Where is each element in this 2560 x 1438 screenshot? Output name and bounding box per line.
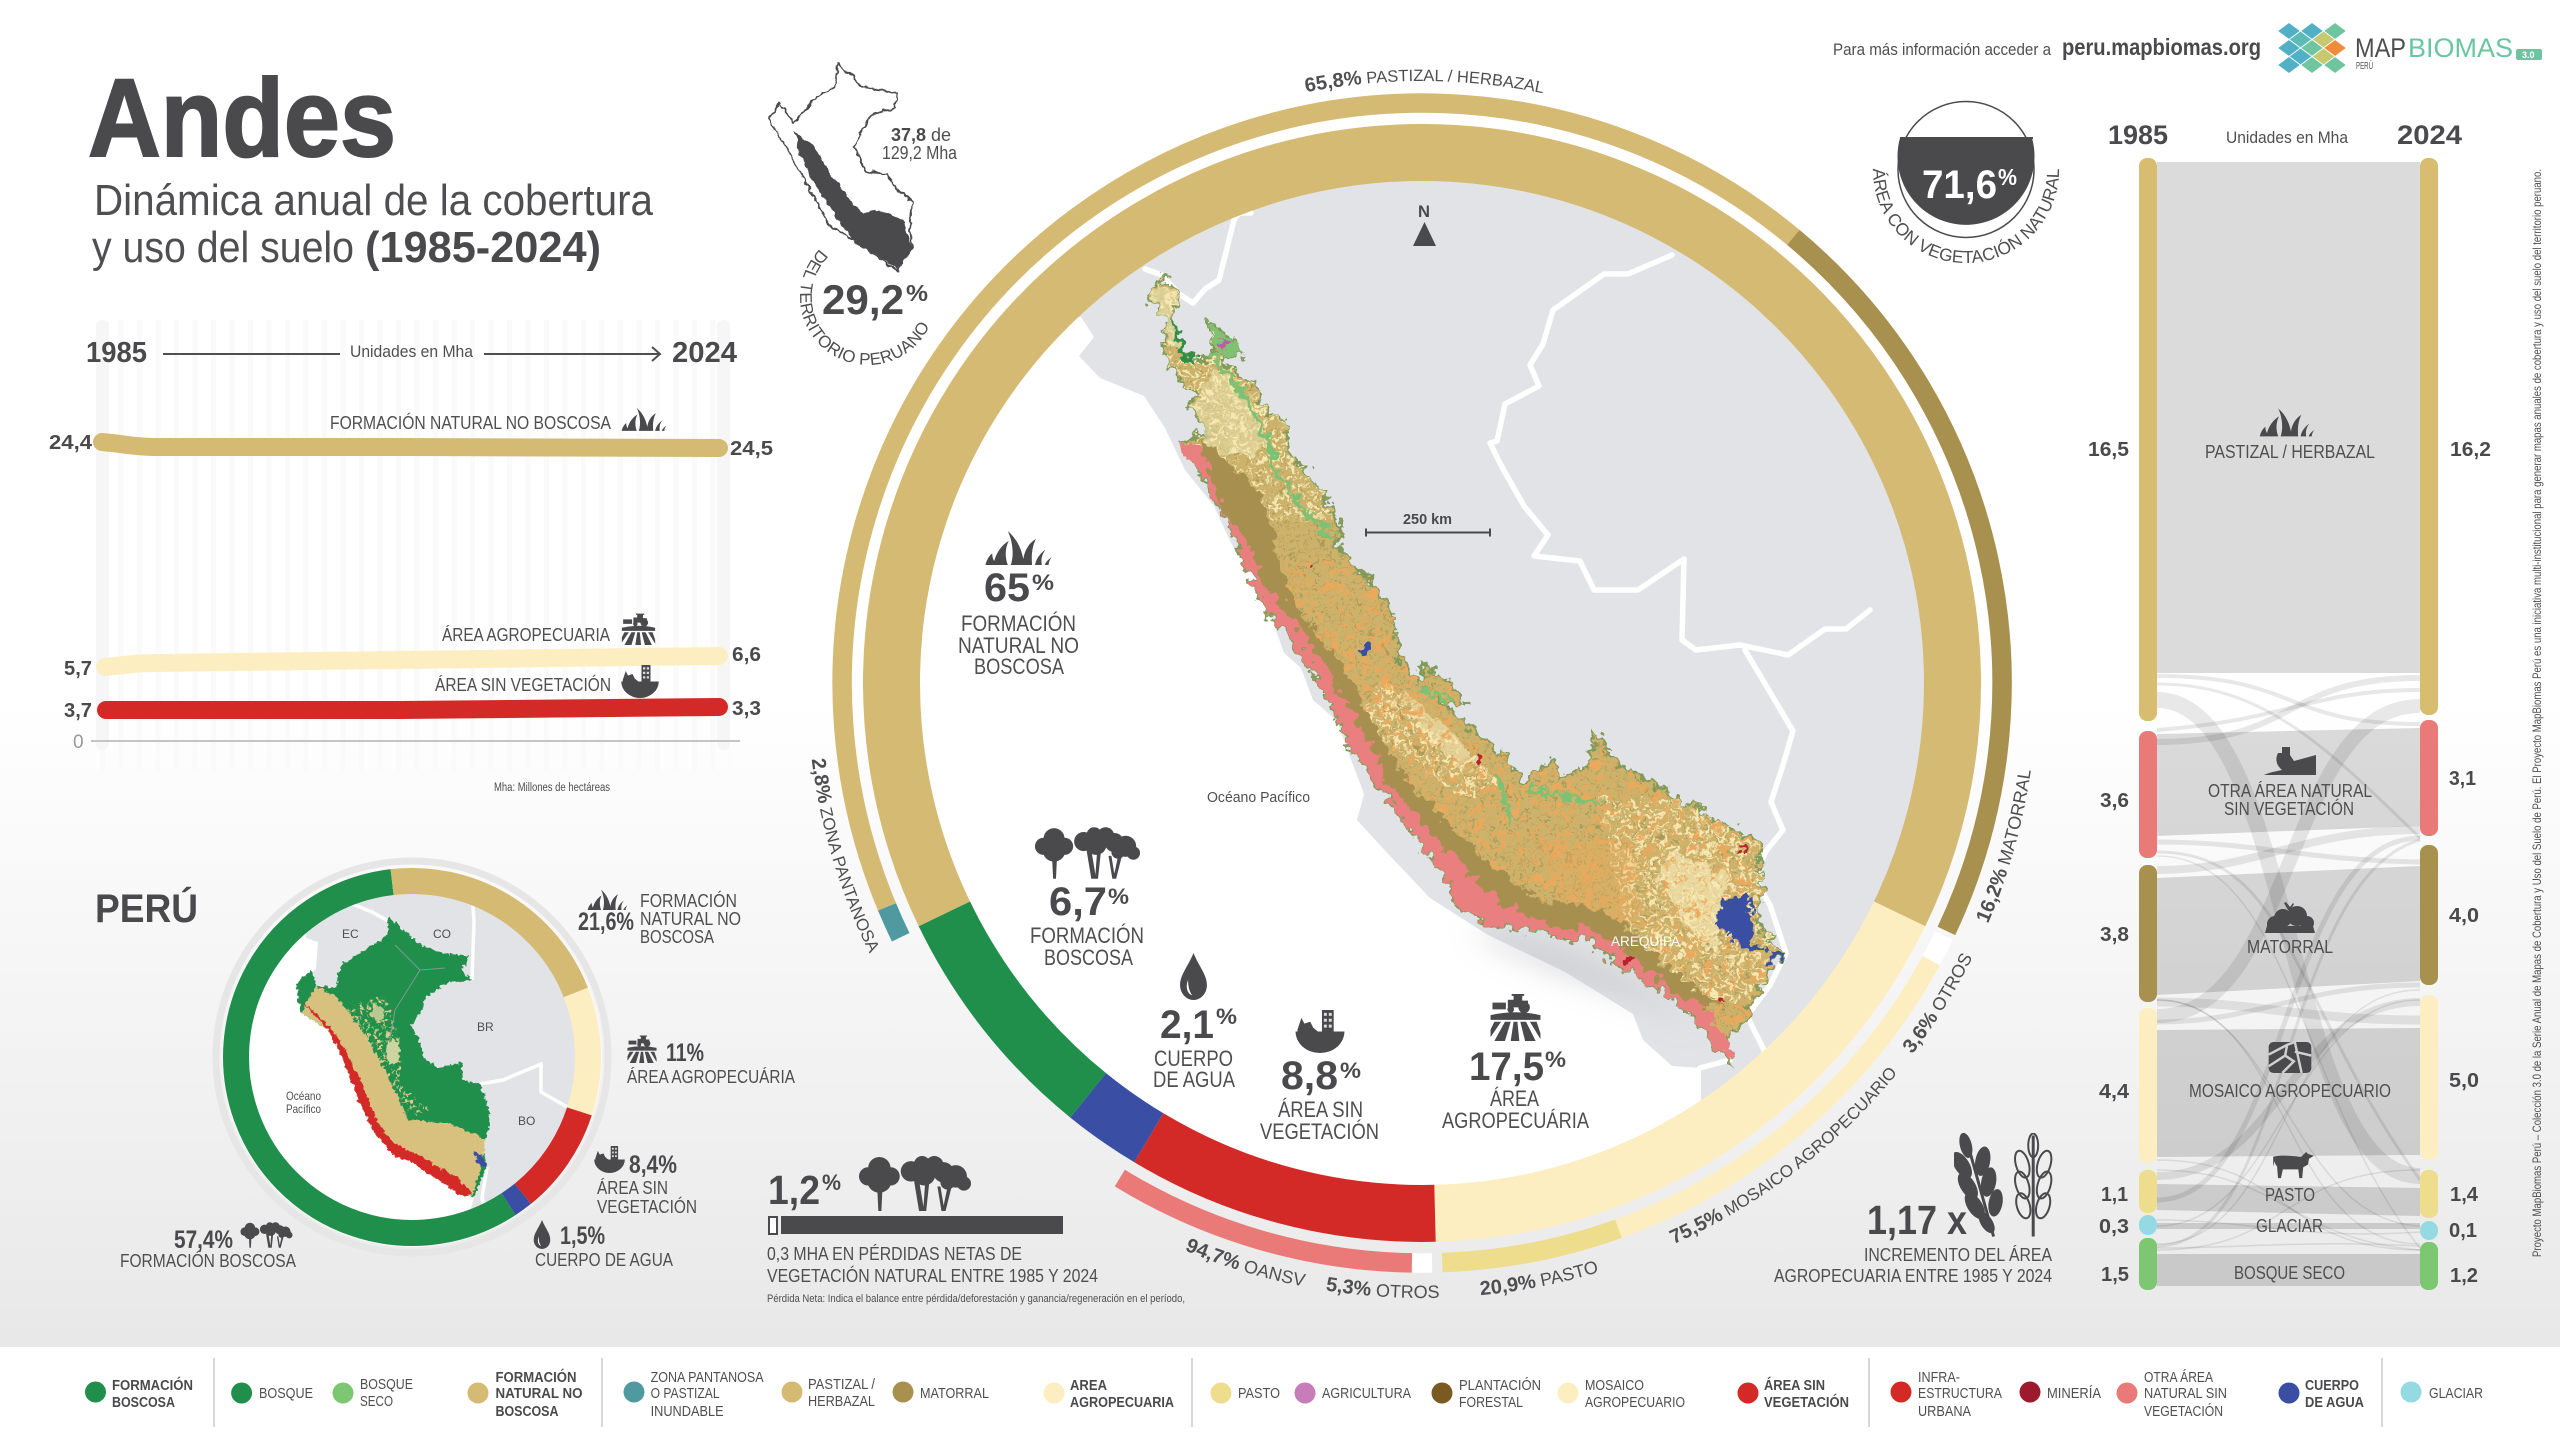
callout: pérdidas netas 1,2%: 0,3 MHA EN PÉRDIDAS NETAS DE	[767, 1244, 1022, 1264]
series: área sin vegetación	[64, 665, 761, 722]
mini map labels: Pacífico	[286, 1102, 321, 1116]
sankey node: matorral: 3,8	[2100, 924, 2129, 946]
series: formación natural no boscosa	[49, 408, 773, 460]
label: formación boscosa 57,4%	[120, 1222, 296, 1271]
curved ring labels: 2,8% ZONA PANTANOSA	[810, 758, 878, 954]
legend: infraestructura urbana: URBANA	[1918, 1404, 1971, 1420]
sankey node: glaciar: 0,3	[2099, 1216, 2129, 1238]
series: formación natural no boscosa: 24,5	[730, 438, 773, 460]
label: cuerpo de agua 1,5%: CUERPO DE AGUA	[535, 1250, 673, 1270]
sankey header	[2108, 120, 2462, 150]
legend: zona pantanosa	[624, 1370, 764, 1420]
stat: cuerpo de agua 2,1%	[1153, 953, 1237, 1092]
stat: formación natural no boscosa 65%: FORMACIÓN	[961, 611, 1076, 636]
mini map labels	[286, 927, 535, 1128]
heading: Perú: PERÚ	[95, 885, 198, 931]
callout: pérdidas netas 1,2%: Pérdida Neta: Indica el balance entre pérdida/deforestación y ganancia/regeneración en el período,	[767, 1293, 1185, 1305]
donut segments	[236, 881, 588, 1233]
north arrow	[1413, 202, 1436, 246]
label: cuerpo de agua 1,5%	[534, 1220, 673, 1270]
curved ring labels: 5,3% OTROS	[1326, 1277, 1439, 1298]
legend: agricultura: AGRICULTURA	[1322, 1386, 1411, 1402]
legend: formación natural no boscosa: FORMACIÓN	[496, 1368, 576, 1386]
sankey node: pasto: 1,4	[2450, 1184, 2479, 1206]
legend: otra área natural sin vegetación	[2116, 1369, 2227, 1420]
header: more information link	[1833, 34, 2261, 60]
label: área agropecuaria 11%: 11%	[666, 1039, 704, 1067]
sankey node: glaciar	[2099, 1215, 2477, 1242]
badge: 71,6% área con vegetación natural: %	[1998, 164, 2017, 190]
scale bar	[1366, 511, 1490, 536]
legend: bosque seco	[332, 1377, 413, 1410]
legend: zona pantanosa: INUNDABLE	[651, 1404, 724, 1420]
outer ring segments	[842, 103, 2002, 1263]
header: more information link: peru.mapbiomas.org	[2062, 34, 2261, 60]
curved ring labels: 3,6% OTROS	[1903, 954, 1971, 1052]
label: formación natural no boscosa 21,6%: 21,6%	[578, 908, 634, 936]
panel: sankey transitions 1985-2024	[2088, 120, 2491, 1290]
legend: matorral: MATORRAL	[920, 1386, 989, 1402]
panel: Perú donut	[95, 860, 795, 1271]
legend: pastizal / herbazal	[782, 1377, 876, 1410]
legend: bosque: BOSQUE	[259, 1386, 313, 1402]
mini map labels: EC	[342, 927, 359, 941]
series: área agropecuaria: 5,7	[64, 658, 92, 680]
stat: formación natural no boscosa 65%: NATURAL NO	[958, 633, 1079, 658]
subtitle: y uso del suelo	[92, 223, 354, 272]
legend: zona pantanosa: ZONA PANTANOSA	[651, 1370, 764, 1386]
series: área agropecuaria: ÁREA AGROPECUARIA	[442, 625, 610, 645]
legend: bosque	[231, 1382, 313, 1404]
sankey header: 1985	[2108, 120, 2168, 150]
sankey node: bosque seco: 1,5	[2101, 1264, 2129, 1286]
stat: formación boscosa 6,7%: %	[1108, 884, 1129, 909]
map label: Océano Pacífico: Océano Pacífico	[1207, 789, 1310, 806]
legend: formación natural no boscosa: NATURAL NO	[496, 1386, 582, 1402]
series: área sin vegetación: 3,7	[64, 700, 92, 722]
label: cuerpo de agua 1,5%: 1,5%	[560, 1222, 605, 1250]
label: área sin vegetación 8,4%: VEGETACIÓN	[597, 1196, 697, 1217]
logo: MapBiomas	[2278, 22, 2542, 74]
mini map labels: Océano	[286, 1089, 321, 1103]
mini map labels: BO	[518, 1114, 535, 1128]
callout: incremento agropecuario 1,17 x: 1,17 x	[1867, 1197, 1967, 1243]
stat: cuerpo de agua 2,1%: %	[1216, 1004, 1237, 1029]
sankey header: Unidades en Mha	[2226, 129, 2349, 147]
callout: pérdidas netas 1,2%: 1,2	[768, 1167, 820, 1213]
label: área agropecuaria 11%	[627, 1036, 795, 1087]
legend: formación natural no boscosa	[468, 1368, 582, 1420]
legend: pasto: PASTO	[1238, 1386, 1280, 1402]
mini map labels: CO	[433, 927, 451, 941]
stat: área sin vegetación 8,8%: 8,8	[1281, 1054, 1338, 1098]
label: área sin vegetación 8,4%	[594, 1146, 697, 1217]
legend: otra área natural sin vegetación: OTRA ÁREA	[2144, 1369, 2213, 1386]
stat: área sin vegetación 8,8%: %	[1340, 1058, 1361, 1083]
map: Andes land cover	[1146, 276, 1783, 1061]
sankey node: matorral	[2100, 845, 2479, 1002]
subtitle: (1985-2024)	[365, 223, 601, 272]
stat: formación natural no boscosa 65%: BOSCOSA	[974, 654, 1064, 679]
text: 37,8 de 129,2 Mha: 129,2 Mha	[882, 143, 958, 163]
label: formación natural no boscosa 21,6%	[578, 890, 741, 947]
stat: área agropecuaria 17,5%: AGROPECUÁRIA	[1442, 1108, 1589, 1133]
sankey node: otra área natural sin vegetación: OTRA ÁREA NATURAL	[2208, 781, 2372, 801]
sankey node: glaciar: 0,1	[2449, 1220, 2477, 1242]
chart years header: 2024	[672, 337, 737, 369]
stat: formación boscosa 6,7%: 6,7	[1049, 880, 1107, 924]
series: formación natural no boscosa: 24,4	[49, 432, 93, 454]
legend: infraestructura urbana	[1890, 1370, 2002, 1420]
legend: otra área natural sin vegetación: NATURAL SIN	[2144, 1386, 2227, 1402]
legend: infraestructura urbana: INFRA-	[1918, 1370, 1960, 1386]
curved text: del territorio peruano: DEL TERRITORIO PERUANO	[800, 250, 928, 365]
sankey node: bosque seco: 1,2	[2450, 1265, 2478, 1287]
map: regional land	[1078, 181, 1924, 1100]
legend: bosque seco: BOSQUE	[360, 1377, 413, 1393]
curved ring labels: 16,2% MATORRAL	[1977, 770, 2031, 923]
legend: infraestructura urbana: ESTRUCTURA	[1918, 1386, 2002, 1402]
label: formación natural no boscosa 21,6%: BOSCOSA	[640, 927, 714, 947]
legend: mosaico agropecuario	[1558, 1378, 1685, 1411]
subtitle: Dinámica anual de la cobertura	[94, 176, 653, 225]
badge: 71,6% área con vegetación natural: ÁREA CON VEGETACIÓN NATURAL	[1872, 168, 2060, 263]
logo: MapBiomas: 3.0	[2522, 50, 2535, 60]
sankey node: matorral: 4,0	[2449, 905, 2479, 927]
legend: área sin vegetación: VEGETACIÓN	[1764, 1393, 1849, 1411]
stat: área agropecuaria 17,5%	[1442, 994, 1589, 1133]
thick ring segments	[892, 152, 1952, 1213]
legend: área agropecuaria: AREA	[1070, 1378, 1107, 1394]
bar: pérdida	[769, 1216, 1063, 1234]
panel: line chart 1985-2024	[49, 320, 773, 794]
curved ring labels: 20,9% PASTO	[1480, 1262, 1597, 1296]
legend: pastizal / herbazal: HERBAZAL	[808, 1394, 875, 1410]
sankey node: otra área natural sin vegetación: 3,6	[2100, 790, 2129, 812]
stat: formación natural no boscosa 65%: %	[1032, 570, 1054, 595]
stat: 29,2%: %	[906, 280, 928, 306]
badge: 71,6% área con vegetación natural	[1872, 100, 2060, 263]
label: formación natural no boscosa 21,6%: NATURAL NO	[640, 909, 741, 929]
label: área sin vegetación 8,4%: 8,4%	[629, 1151, 677, 1179]
sankey node: matorral: MATORRAL	[2247, 937, 2333, 957]
legend: plantación forestal	[1432, 1377, 1541, 1411]
stat: formación natural no boscosa 65%	[958, 531, 1079, 679]
logo: MapBiomas: BIOMAS	[2408, 33, 2513, 63]
logo: MapBiomas: MAP	[2355, 33, 2406, 63]
stat: formación natural no boscosa 65%: 65	[984, 566, 1030, 610]
sankey node: otra área natural sin vegetación	[2100, 720, 2476, 858]
sankey node: pasto: 1,1	[2101, 1184, 2128, 1206]
legend: agricultura	[1294, 1382, 1411, 1404]
sankey node: bosque seco: BOSQUE SECO	[2234, 1263, 2345, 1283]
sankey node: pastizal / herbazal: PASTIZAL / HERBAZAL	[2205, 442, 2375, 462]
logo: MapBiomas: PERÚ	[2356, 59, 2373, 72]
sankey node: glaciar: GLACIAR	[2256, 1216, 2323, 1236]
callout: incremento agropecuario 1,17 x	[1774, 1131, 2054, 1286]
sankey node: otra área natural sin vegetación: 3,1	[2449, 768, 2476, 790]
legend: pastizal / herbazal: PASTIZAL /	[808, 1377, 876, 1393]
stat: formación boscosa 6,7%	[1030, 827, 1144, 970]
legend: área sin vegetación: ÁREA SIN	[1764, 1377, 1825, 1394]
mini map labels: BR	[477, 1020, 494, 1034]
sankey node: pasto: PASTO	[2265, 1185, 2315, 1205]
chart note: Mha: Millones de hectáreas	[494, 782, 610, 794]
legend: área sin vegetación	[1738, 1377, 1849, 1411]
sankey node: mosaico agropecuario: MOSAICO AGROPECUARIO	[2189, 1081, 2391, 1101]
badge: 71,6% área con vegetación natural: 71,6	[1922, 163, 1997, 207]
curved ring labels: 94,7% OANSV	[1186, 1238, 1306, 1286]
legend: otra área natural sin vegetación: VEGETACIÓN	[2144, 1403, 2223, 1420]
icon: Perú outline	[769, 64, 912, 271]
sankey node: pastizal / herbazal: 16,2	[2450, 439, 2491, 461]
title: Andes	[88, 57, 396, 180]
legend: mosaico agropecuario: MOSAICO	[1585, 1378, 1644, 1394]
chart years header: 1985	[86, 337, 147, 369]
callout: pérdidas netas 1,2%: VEGETACIÓN NATURAL ENTRE 1985 Y 2024	[767, 1265, 1098, 1286]
curved ring labels: 65,8% PASTIZAL / HERBAZAL	[1305, 70, 1543, 94]
series: formación natural no boscosa: FORMACIÓN NATURAL NO BOSCOSA	[330, 412, 611, 433]
series: área sin vegetación: 3,3	[732, 698, 761, 720]
legend: minería: MINERÍA	[2047, 1385, 2101, 1402]
sankey node: pasto	[2101, 1152, 2479, 1218]
legend: matorral	[892, 1382, 989, 1402]
stat: área agropecuaria 17,5%: ÁREA	[1490, 1086, 1539, 1111]
legend: cuerpo de agua: CUERPO	[2305, 1378, 2359, 1394]
stat: área agropecuaria 17,5%: 17,5	[1469, 1045, 1544, 1089]
legend: formación boscosa: FORMACIÓN	[112, 1376, 193, 1394]
sankey node: mosaico agropecuario: 4,4	[2099, 1081, 2130, 1103]
stat: área agropecuaria 17,5%: %	[1545, 1047, 1566, 1072]
label: formación boscosa 57,4%: 57,4%	[174, 1226, 233, 1254]
sankey node: pastizal / herbazal	[2088, 158, 2491, 721]
header: more information link: Para más información acceder a	[1833, 40, 2051, 59]
stat: área sin vegetación 8,8%: VEGETACIÓN	[1260, 1119, 1379, 1144]
legend: formación boscosa: BOSCOSA	[112, 1395, 175, 1411]
label: formación natural no boscosa 21,6%: FORMACIÓN	[640, 890, 737, 911]
series: área sin vegetación: ÁREA SIN VEGETACIÓN	[435, 674, 611, 695]
chart years header	[86, 337, 737, 369]
series: área agropecuaria	[64, 614, 761, 680]
text: 37,8 de 129,2 Mha	[882, 125, 958, 163]
text: 37,8 de 129,2 Mha: 37,8 de	[891, 125, 951, 145]
scale bar: 250 km	[1403, 511, 1452, 528]
callout: pérdidas netas 1,2%	[767, 1156, 1185, 1305]
legend: mosaico agropecuario: AGROPECUARIO	[1585, 1395, 1685, 1411]
map label: Arequipa: AREQUIPA	[1611, 933, 1681, 949]
map: Perú land cover	[296, 894, 575, 1209]
sankey node: pastizal / herbazal: 16,5	[2088, 439, 2129, 461]
legend: cuerpo de agua	[2278, 1378, 2364, 1411]
north arrow: N	[1418, 202, 1430, 221]
legend: minería	[2020, 1382, 2101, 1402]
label: formación boscosa 57,4%: FORMACIÓN BOSCOSA	[120, 1250, 296, 1271]
sankey header: 2024	[2397, 120, 2462, 150]
legend: plantación forestal: PLANTACIÓN	[1459, 1377, 1541, 1394]
axis zero line: 0	[73, 732, 84, 753]
subtitle	[92, 176, 653, 272]
stat: cuerpo de agua 2,1%: 2,1	[1160, 1003, 1214, 1047]
stat: formación boscosa 6,7%: FORMACIÓN	[1030, 923, 1144, 948]
legend: área agropecuaria: AGROPECUARIA	[1070, 1395, 1174, 1411]
sankey node: mosaico agropecuario: 5,0	[2449, 1070, 2479, 1092]
stat: formación boscosa 6,7%: BOSCOSA	[1044, 945, 1133, 970]
legend: zona pantanosa: O PASTIZAL	[651, 1386, 720, 1402]
stat: cuerpo de agua 2,1%: DE AGUA	[1153, 1067, 1235, 1092]
sankey node: otra área natural sin vegetación: SIN VEGETACIÓN	[2224, 798, 2354, 819]
label: área agropecuaria 11%: ÁREA AGROPECUÁRIA	[627, 1067, 795, 1087]
legend: cuerpo de agua: DE AGUA	[2305, 1395, 2364, 1411]
legend: formación boscosa	[85, 1376, 193, 1411]
stat: área sin vegetación 8,8%: ÁREA SIN	[1278, 1097, 1363, 1122]
panel: territorio peruano	[768, 62, 958, 365]
label: área sin vegetación 8,4%: ÁREA SIN	[597, 1178, 668, 1198]
panel: main Andes circle	[810, 70, 2031, 1298]
stat: 29,2%: 29,2	[822, 276, 904, 323]
legend: glaciar	[2400, 1382, 2483, 1402]
legend: glaciar: GLACIAR	[2429, 1386, 2483, 1402]
sankey node: mosaico agropecuario	[2099, 995, 2479, 1163]
callout: pérdidas netas 1,2%: %	[822, 1170, 841, 1195]
panel: legend footer	[0, 1347, 2560, 1438]
sankey node: bosque seco	[2101, 1238, 2478, 1290]
legend: bosque seco: SECO	[360, 1394, 393, 1410]
stat: área sin vegetación 8,8%	[1260, 1010, 1379, 1144]
chart years header: Unidades en Mha	[350, 343, 474, 361]
callout: incremento agropecuario 1,17 x: INCREMENTO DEL ÁREA	[1864, 1245, 2052, 1265]
legend: pasto	[1210, 1382, 1280, 1404]
legend: formación natural no boscosa: BOSCOSA	[496, 1404, 559, 1420]
curved ring labels: 75,5% MOSAICO AGROPECUARIO	[1668, 1068, 1895, 1243]
legend: área agropecuaria	[1044, 1378, 1174, 1411]
stat: cuerpo de agua 2,1%: CUERPO	[1154, 1046, 1233, 1071]
curved ring labels	[810, 70, 2031, 1298]
series: área agropecuaria: 6,6	[732, 644, 761, 666]
legend: plantación forestal: FORESTAL	[1459, 1395, 1523, 1411]
callout: incremento agropecuario 1,17 x: AGROPECUARIA ENTRE 1985 Y 2024	[1774, 1266, 2052, 1286]
sankey flows	[2157, 162, 2420, 1286]
